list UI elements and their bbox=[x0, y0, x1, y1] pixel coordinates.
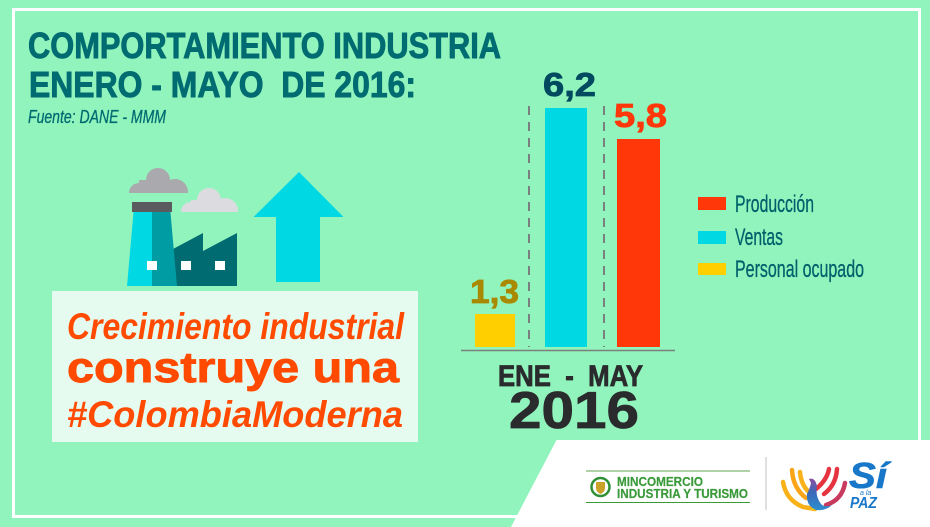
value: personal ocupado: 1,3 bbox=[470, 273, 519, 310]
logo: Mincomercio bbox=[586, 471, 750, 502]
source note: Fuente: DANE - MMM bbox=[28, 107, 166, 127]
title bbox=[28, 25, 501, 105]
value: produccion: 5,8 bbox=[614, 97, 667, 134]
legend: Ventas bbox=[735, 224, 783, 251]
icon: up arrow bbox=[254, 172, 344, 282]
title: COMPORTAMIENTO INDUSTRIA bbox=[28, 25, 501, 66]
logo: Si a la Paz bbox=[783, 455, 891, 512]
footer panel bbox=[511, 440, 930, 527]
icon: factory with clouds bbox=[127, 168, 238, 286]
legend bbox=[698, 191, 864, 283]
value: ventas: 6,2 bbox=[543, 66, 596, 103]
legend: Personal ocupado bbox=[735, 256, 864, 283]
bar chart bbox=[461, 66, 675, 350]
legend: Producción bbox=[735, 191, 814, 218]
logo: Mincomercio: INDUSTRIA Y TURISMO bbox=[617, 486, 748, 501]
bar: produccion bbox=[617, 139, 660, 347]
title: ENERO - MAYO DE 2016: bbox=[29, 64, 416, 105]
callout: slogan: #ColombiaModerna bbox=[67, 394, 403, 435]
logo: Si a la Paz: Sí bbox=[849, 455, 891, 496]
callout: slogan: Crecimiento industrial bbox=[67, 306, 405, 347]
callout: slogan: construye una bbox=[67, 344, 400, 392]
callout: slogan bbox=[52, 291, 418, 442]
logo: Si a la Paz: PAZ bbox=[850, 495, 878, 512]
logo: Mincomercio: MINCOMERCIO bbox=[617, 474, 703, 489]
logo: Si a la Paz: a la bbox=[860, 490, 871, 497]
bar: ventas bbox=[545, 108, 587, 347]
chart period label bbox=[498, 360, 643, 440]
chart period label: 2016 bbox=[509, 382, 639, 440]
bar: personal ocupado bbox=[475, 314, 515, 347]
chart period label: ENE - MAY bbox=[498, 360, 643, 393]
